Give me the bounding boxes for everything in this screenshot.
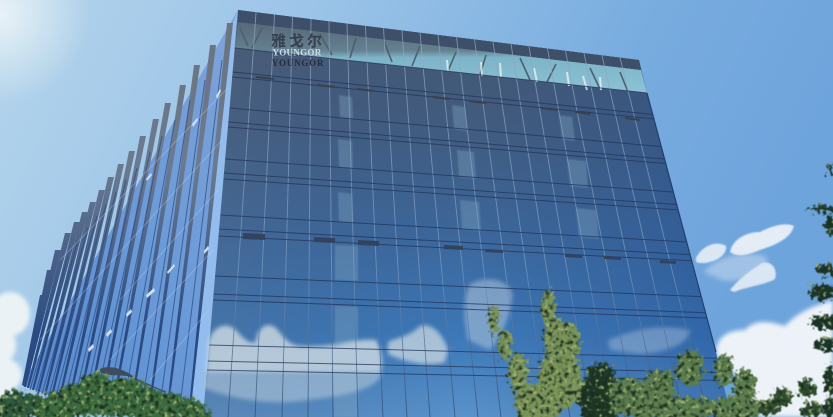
floor lines (207, 48, 723, 380)
bright corner strip (191, 10, 238, 417)
clouds in the sky: left (0, 292, 30, 407)
trees: bottom left (0, 372, 211, 417)
building: left side face with fins (22, 10, 238, 417)
clouds in the sky: right (696, 224, 794, 292)
tree: dark centre (574, 362, 628, 417)
building: front glass facade (203, 10, 731, 417)
tree: conifer at right edge (808, 164, 833, 417)
rooftop glass band with trusses (235, 22, 647, 93)
dark open window vents (256, 76, 640, 121)
front face right edge (647, 93, 716, 352)
company sign: YOUNGOR (272, 48, 322, 58)
large cloud behind the trees (716, 300, 833, 417)
tree: right broadleaf (608, 350, 824, 417)
vertical fins (22, 23, 233, 407)
thin cross lines on side face (40, 90, 226, 380)
tree: yellow-green sapling (489, 290, 582, 417)
top parapet (238, 10, 641, 70)
company sign: 雅戈尔 (271, 33, 325, 50)
mullions (228, 12, 708, 417)
street lamp (100, 367, 165, 392)
thin dark lines between fins (30, 60, 222, 406)
cloud reflections in the glass (203, 279, 690, 402)
lighter glass panes (334, 95, 599, 417)
small window markers on side face (88, 89, 221, 352)
company sign: YOUNGOR (272, 58, 324, 68)
company sign (271, 33, 325, 68)
